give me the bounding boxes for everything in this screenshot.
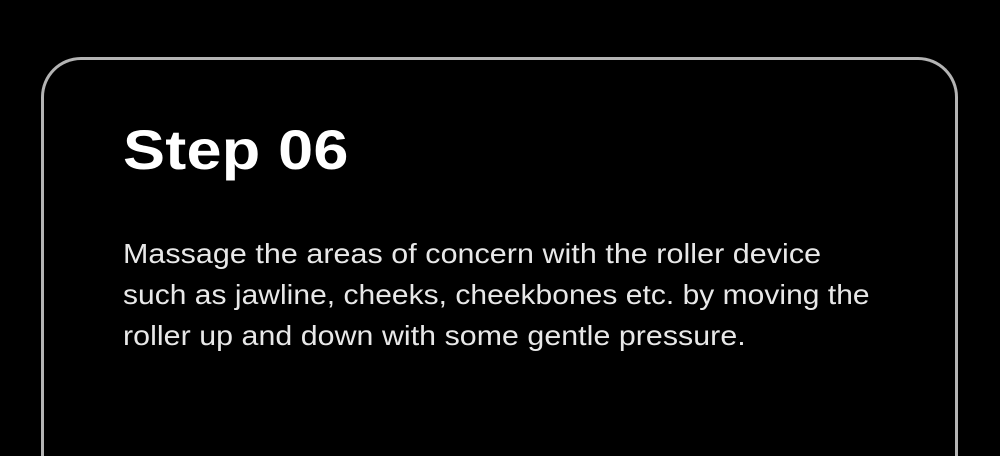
text block: step description: Massage the areas of concern with the roller device — [123, 238, 821, 269]
text block: step description: roller up and down with some gentle pressure. — [123, 320, 746, 351]
text block: step description: such as jawline, cheeks, cheekbones etc. by moving the — [123, 279, 870, 310]
text block: step description — [123, 238, 870, 351]
heading: Step 06: Step 06 — [123, 118, 349, 181]
